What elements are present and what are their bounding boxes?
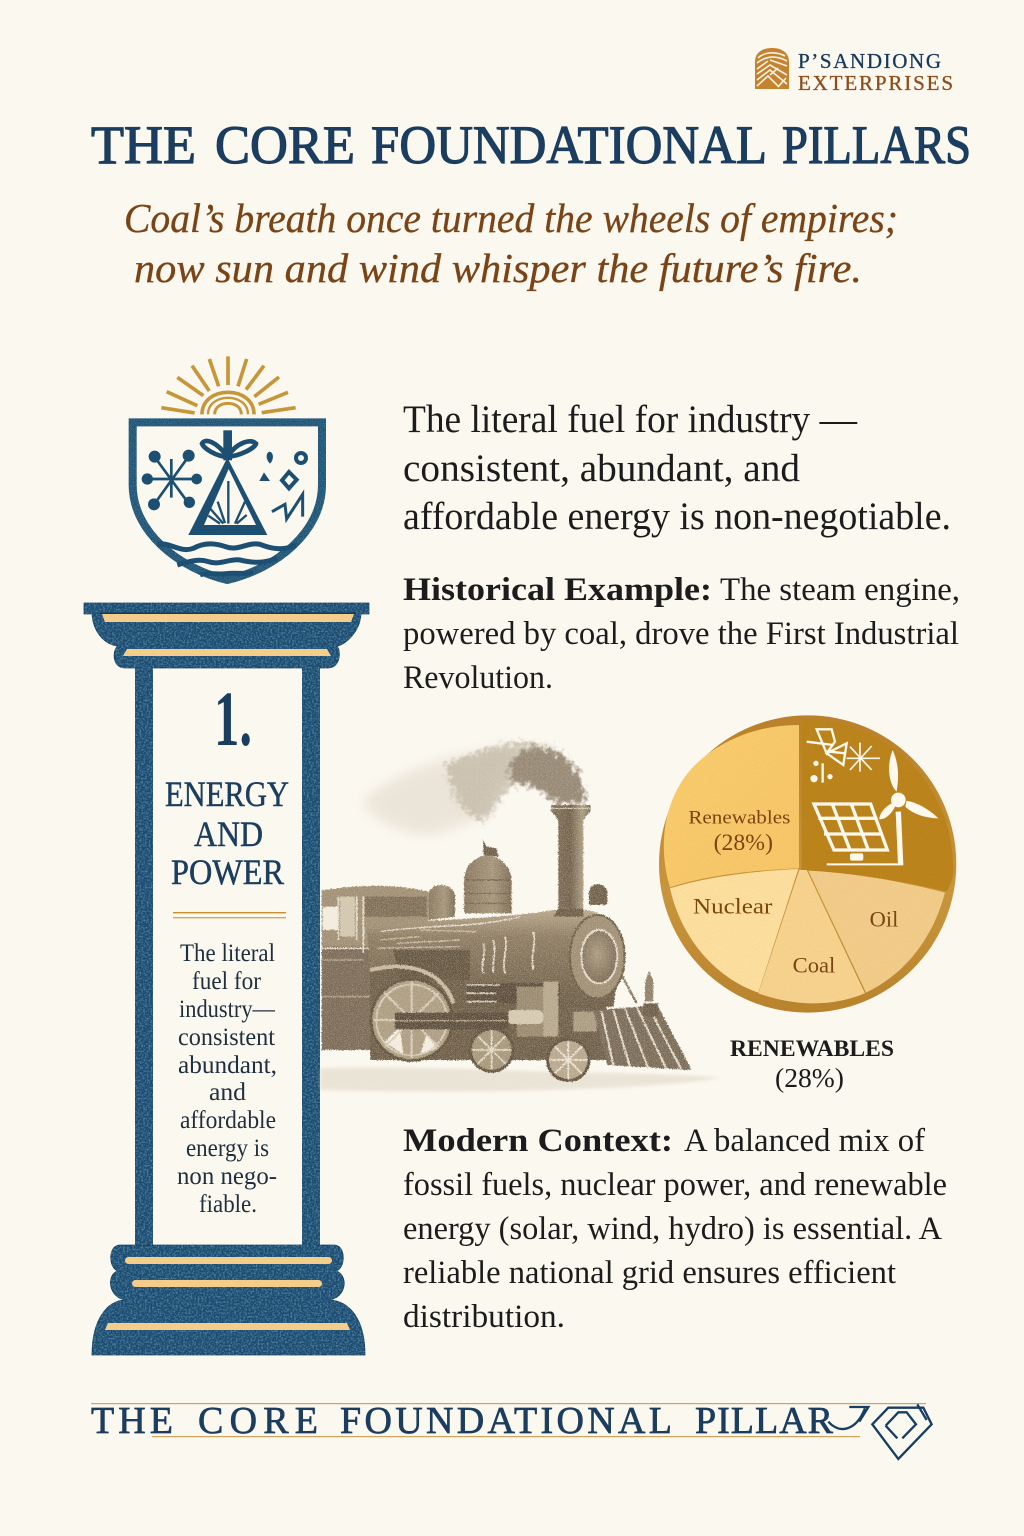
illustration: steam locomotive [320, 743, 720, 1091]
running gear [370, 967, 597, 1037]
cowcatcher [593, 971, 692, 1070]
historical example text: powered by coal, drove the First Industrial [403, 616, 959, 652]
pillar number: 1. [214, 675, 252, 762]
historical example text: The steam engine, [720, 572, 960, 608]
modern context text [403, 1123, 947, 1335]
pillar description: affordable [180, 1107, 276, 1134]
pillar shaft [135, 666, 320, 1248]
intro text: The literal fuel for industry — [403, 398, 858, 441]
pillar description: non nego- [177, 1163, 277, 1190]
modern context text: fossil fuels, nuclear power, and renewable [403, 1167, 947, 1203]
pie caption [730, 1036, 894, 1093]
icon: scattered symbols [259, 452, 306, 519]
footer title: CORE [198, 1400, 318, 1442]
slice: renewables [664, 725, 799, 887]
modern context text: A balanced mix of [684, 1123, 925, 1159]
icon: spark [143, 451, 201, 509]
brand logo [755, 48, 953, 95]
cab and tender [322, 886, 428, 1050]
pillar description: consistent [178, 1024, 275, 1051]
wheels [371, 979, 589, 1081]
tagline: Coal’s breath once turned the wheels of empires; [124, 195, 898, 241]
pie labels: Nuclear [693, 893, 773, 918]
pie rim [659, 715, 956, 1013]
brand subtitle: EXTERPRISES [798, 71, 953, 95]
footer title: FOUNDATIONAL [340, 1400, 672, 1442]
pillar description: energy is [186, 1135, 269, 1162]
footer banner [91, 1400, 932, 1459]
icon: triangle with plant [188, 430, 267, 535]
pie labels: Oil [870, 907, 898, 932]
pillar [84, 603, 369, 1355]
historical example text: Revolution. [403, 660, 553, 696]
modern context text: distribution. [403, 1299, 565, 1335]
tagline [124, 195, 898, 291]
smokebox face [570, 915, 625, 998]
footer title: THE [91, 1400, 173, 1442]
pie caption: (28%) [775, 1063, 844, 1093]
pillar description: abundant, [178, 1052, 277, 1079]
locomotive body [322, 805, 692, 1081]
pillar description: industry— [179, 996, 276, 1023]
pillar heading: POWER [171, 852, 284, 892]
slice: coal [758, 870, 865, 1003]
modern context text: Modern Context: [403, 1123, 673, 1159]
footer title: PILLAR [695, 1400, 834, 1442]
ground [320, 1067, 720, 1091]
pillar description: fiable. [199, 1191, 257, 1218]
footer title [91, 1400, 834, 1442]
pillar description: fuel for [192, 968, 262, 995]
title: FOUNDATIONAL [371, 115, 767, 175]
title: CORE [215, 115, 355, 175]
shield emblem [143, 430, 306, 575]
pie chart: energy mix [659, 715, 956, 1013]
pie labels: Coal [793, 952, 835, 977]
pillar heading: AND [194, 814, 263, 854]
pillar description [177, 940, 277, 1218]
domes and stack [428, 805, 607, 920]
title: PILLARS [782, 115, 971, 175]
pillar heading [165, 774, 289, 892]
pillar heading: ENERGY [165, 774, 289, 814]
title: THE [91, 115, 196, 175]
pillar capital [84, 603, 369, 668]
smoke [363, 743, 587, 835]
intro text: consistent, abundant, and [403, 447, 801, 490]
pie caption: RENEWABLES [730, 1036, 894, 1061]
dark frame behind wheels [370, 967, 607, 1060]
icon: waves [157, 544, 296, 575]
intro text [403, 398, 951, 538]
slice: oil [808, 871, 945, 993]
historical example text [403, 572, 960, 696]
title [91, 115, 971, 175]
pillar description: and [209, 1079, 246, 1106]
tagline: now sun and wind whisper the future’s fire. [134, 245, 862, 291]
icon: diamond [828, 1404, 932, 1459]
slice: solar and wind [802, 719, 953, 892]
pie labels [688, 807, 898, 977]
icon: woven arch emblem [755, 48, 789, 89]
brand name: P’SANDIONG [798, 49, 941, 73]
boiler [367, 910, 622, 1007]
icon: rising sun [161, 356, 296, 414]
icons: solar panel, wind turbine, sparks [807, 729, 938, 864]
icon: sun and shield crest [133, 356, 322, 580]
pillar base [92, 1245, 365, 1355]
modern context text: energy (solar, wind, hydro) is essential. A [403, 1211, 942, 1247]
shield outline [133, 422, 322, 580]
pie labels: Renewables [688, 807, 790, 828]
intro text: affordable energy is non-negotiable. [403, 495, 951, 538]
historical example text: Historical Example: [403, 572, 712, 608]
pillar description: The literal [180, 940, 275, 967]
slice: nuclear [670, 869, 798, 993]
modern context text: reliable national grid ensures efficient [403, 1255, 896, 1291]
pie labels: (28%) [714, 830, 773, 855]
